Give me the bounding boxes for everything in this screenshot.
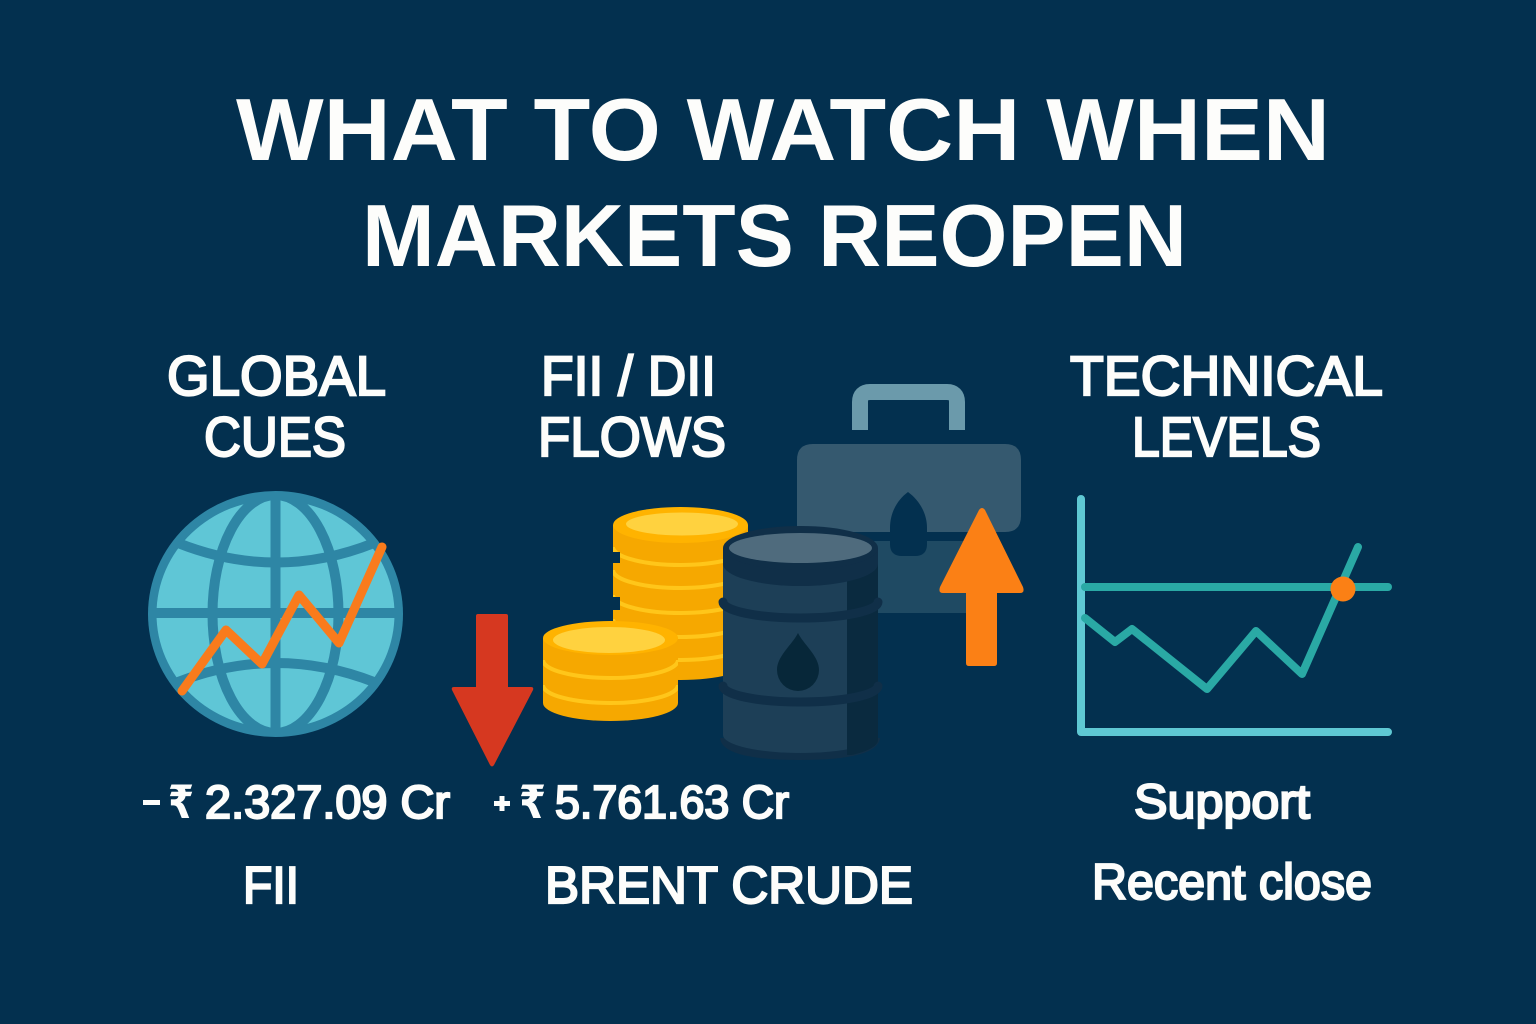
- value: FII outflow: 2.327.09 Cr: [205, 776, 450, 828]
- heading: technical levels: LEVELS: [1132, 405, 1321, 468]
- icon: orange up arrow: [939, 508, 1024, 666]
- heading: FII / DII flows: FII / DII: [541, 344, 716, 407]
- icon: red down arrow: [452, 614, 533, 766]
- title: WHAT TO WATCH WHEN: [236, 80, 1330, 179]
- heading: FII / DII flows: FLOWS: [538, 405, 726, 468]
- icon: front coin stack: [543, 621, 678, 721]
- label: recent close: Recent close: [1092, 854, 1372, 910]
- heading: technical levels: [1070, 344, 1383, 468]
- value: DII inflow: 5.761.63 Cr: [555, 776, 789, 828]
- title: MARKETS REOPEN: [362, 186, 1187, 285]
- label: support: Support: [1134, 776, 1310, 829]
- heading: global cues: CUES: [204, 405, 346, 468]
- label: Brent crude: BRENT CRUDE: [545, 857, 913, 915]
- label: FII: FII: [243, 857, 299, 915]
- heading: global cues: GLOBAL: [167, 344, 386, 407]
- value: FII outflow: ₹: [168, 776, 194, 828]
- heading: global cues: [167, 344, 386, 468]
- icon: globe with rising line: [148, 488, 403, 740]
- icon: back coin stack: [613, 507, 748, 680]
- icon: oil barrel: [720, 526, 880, 760]
- heading: FII / DII flows: [538, 344, 726, 468]
- line chart: technical levels: [1081, 499, 1388, 732]
- value: DII inflow: ₹: [519, 776, 546, 828]
- icon: briefcase: [797, 392, 1021, 613]
- heading: technical levels: TECHNICAL: [1070, 344, 1383, 407]
- title: [236, 80, 1330, 285]
